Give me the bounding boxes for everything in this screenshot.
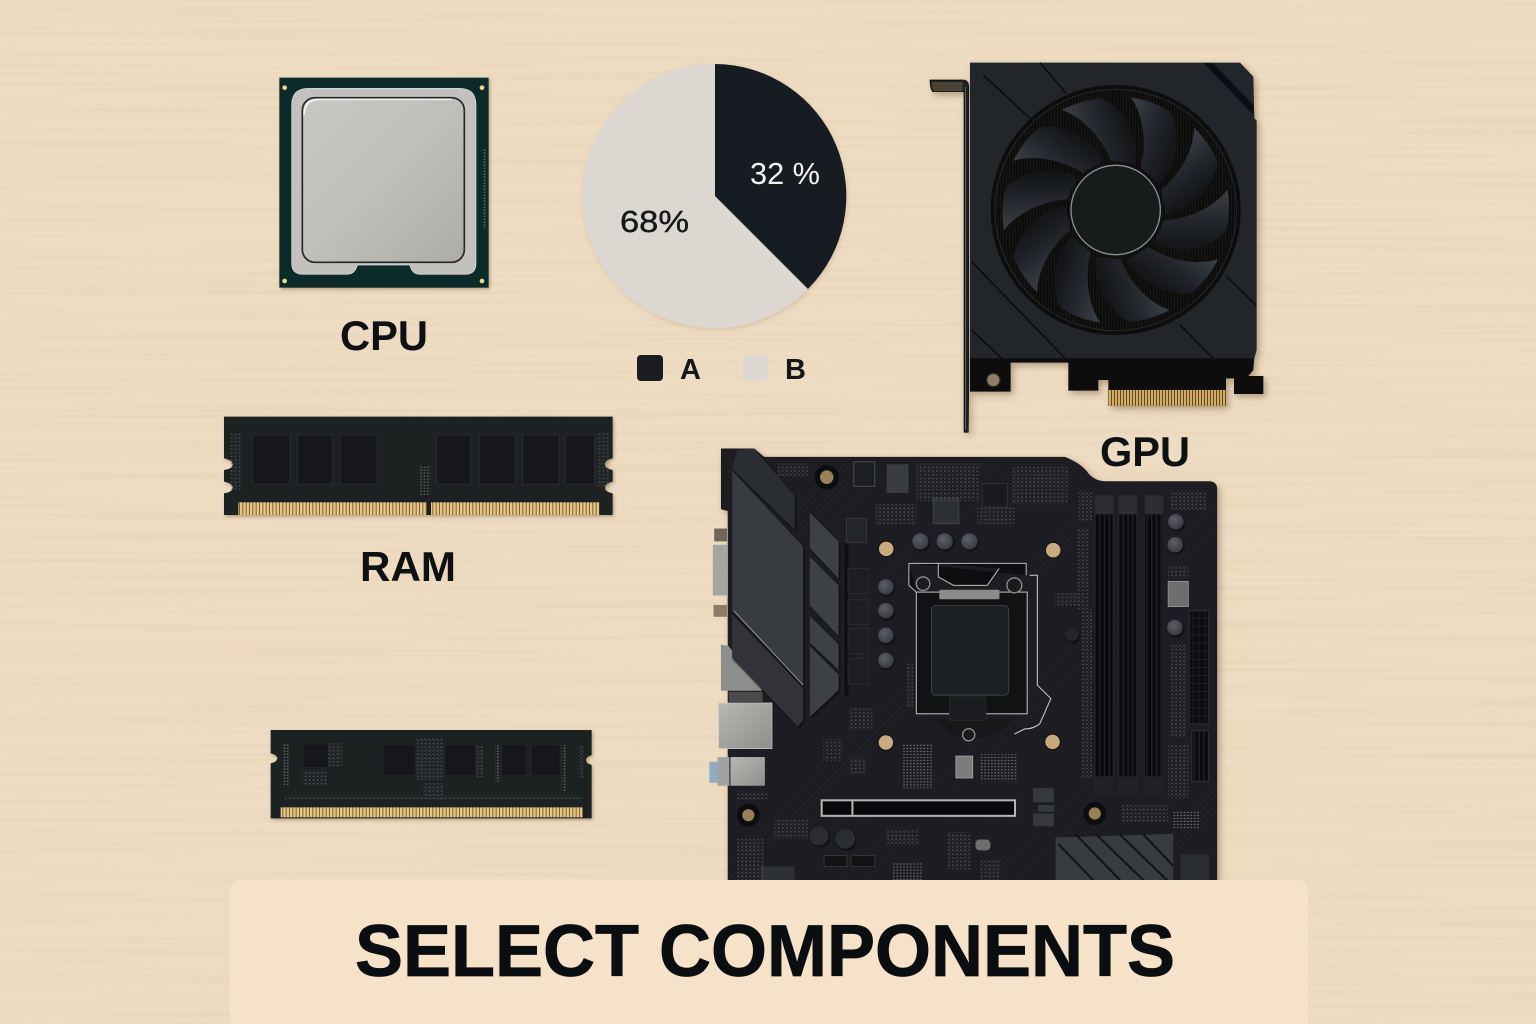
GPU lower PCB and connector tabs [970, 357, 1263, 394]
motherboard PCB [721, 448, 1217, 890]
CPU lid highlight [304, 99, 452, 115]
socket screws [916, 577, 1022, 741]
CPU label: CPU [340, 312, 428, 359]
banner title: SELECT COMPONENTS [355, 911, 1175, 992]
SO-DIMM surface components [283, 738, 584, 800]
legend swatch B [743, 355, 768, 381]
GPU fan [992, 87, 1239, 333]
fan hub [1071, 165, 1160, 255]
secondary connector [1192, 731, 1209, 781]
socket load bar [939, 590, 999, 599]
surface chips [761, 462, 1188, 887]
slice B 68% [582, 64, 808, 328]
fan blades [993, 88, 1239, 332]
legend swatch A [637, 355, 663, 381]
motherboard [709, 448, 1217, 890]
banner panel [230, 880, 1308, 1024]
RAM gold contacts left [238, 502, 427, 515]
socket CPU cover [932, 606, 1009, 695]
fan rim highlight [995, 89, 1236, 331]
CPU heat spreader base [292, 88, 476, 274]
RAM DIMM slots [1095, 496, 1163, 795]
RAM desktop DIMM module [224, 417, 613, 515]
socket latch lever [1014, 575, 1051, 734]
SO-DIMM memory module [271, 730, 592, 818]
RAM surface components [230, 432, 609, 495]
pie value 32%: 32 % [750, 156, 820, 191]
ringed screw holes [740, 468, 1104, 824]
GPU bracket highlight [964, 87, 966, 430]
legend [637, 354, 806, 386]
SO-DIMM gold contacts [281, 807, 583, 817]
ATX power connector [1189, 611, 1209, 724]
socket top retention [909, 563, 1026, 592]
title banner [230, 880, 1308, 1024]
GPU graphics card [930, 63, 1263, 432]
rear IO ports [709, 529, 772, 786]
chipset heatsink [1056, 834, 1209, 890]
PCB trace texture [721, 448, 1217, 890]
slice A 32% [715, 64, 846, 289]
CPU edge components [483, 148, 486, 228]
legend label A: A [680, 354, 701, 386]
socket frame [916, 592, 1027, 714]
SO-DIMM chips [303, 744, 560, 776]
CPU corner contacts [282, 85, 484, 283]
VRM chokes [848, 568, 868, 684]
GPU shroud panel lines [972, 63, 1256, 358]
GPU corner vent [1203, 63, 1253, 115]
GPU shroud [970, 63, 1257, 358]
CPU processor [279, 78, 489, 288]
pie value 68%: 68% [620, 204, 689, 239]
PCIe slot [822, 788, 1054, 826]
mounting holes [878, 541, 1061, 750]
capacitors [810, 514, 1184, 849]
fan rim [992, 87, 1239, 333]
RAM gold contacts right [431, 502, 599, 515]
CPU green substrate [279, 78, 489, 288]
fan cavity with heatsink fins [993, 87, 1238, 333]
legend label B: B [785, 354, 806, 386]
socket lower tab [949, 697, 986, 721]
RAM label: RAM [360, 543, 456, 590]
GPU label: GPU [1100, 428, 1190, 475]
pie chart [582, 64, 846, 328]
CPU heat spreader lid [302, 98, 464, 262]
GPU screw hole [987, 373, 1000, 387]
CPU socket [909, 563, 1051, 741]
GPU gold fingers [1108, 390, 1226, 406]
SMD component clusters [737, 464, 1207, 883]
RAM circuit board [224, 417, 613, 515]
SO-DIMM circuit board [271, 730, 592, 818]
RAM memory chips [253, 435, 594, 484]
socket backplate bulge [933, 719, 1013, 740]
GPU bracket tab [931, 82, 963, 91]
VRM heatsink [732, 448, 847, 727]
GPU bracket [930, 80, 969, 432]
